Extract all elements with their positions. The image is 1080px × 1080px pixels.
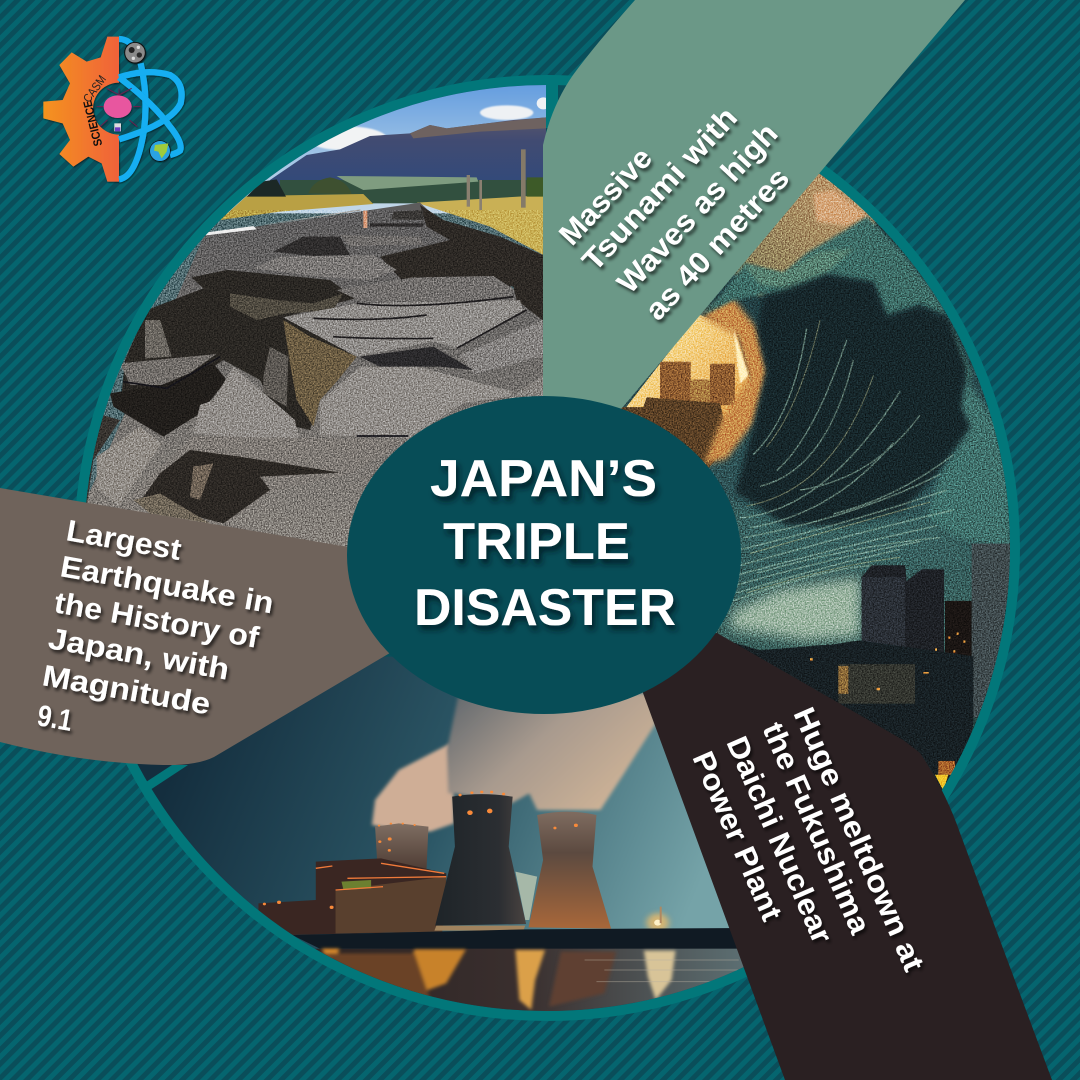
title: DISASTER [414,579,676,637]
earthquake label: Magnitude [40,659,213,721]
earthquake label: the History of [52,586,262,655]
earthquake label: Japan, with [46,622,232,687]
meltdown label: Huge meltdown at [787,703,930,976]
icon: atom orbits [119,39,182,179]
band: tsunami [543,0,965,420]
meltdown label: the Fukushima [756,718,876,939]
ring spur top [546,78,558,128]
icon: orange half gear [43,37,119,182]
title: JAPAN’S [430,450,657,508]
central ellipse [347,396,741,714]
earthquake label: Earthquake in [58,550,276,620]
logo wordmark: science: SCIENCE [80,99,105,148]
logo wordmark: casm: CASM [80,73,109,105]
title [414,450,676,637]
meltdown label: Power Plant [686,747,788,926]
meltdown label [686,703,930,976]
band: earthquake [0,488,395,765]
photo: tsunami wave over city [620,174,1010,790]
photo: cracked road after earthquake [86,85,546,547]
icon: earth [150,141,170,161]
tsunami label: Massive [553,142,659,252]
earthquake label: Largest [64,514,184,567]
logo: Sciencecasm [43,37,182,182]
earthquake label [35,514,276,738]
earthquake label: 9.1 [35,699,75,738]
ring spur lower left [146,765,188,790]
tsunami label [553,101,796,327]
tsunami label: as 40 metres [639,162,796,327]
icon: brain bulb [97,88,141,131]
band: meltdown [640,633,1052,1080]
photo: nuclear power plant at dusk [138,656,744,1011]
icon: moon [125,42,145,63]
meltdown label: Daichi Nuclear [720,732,839,949]
title: TRIPLE [443,513,630,571]
tsunami label: Tsunami with [576,101,744,278]
tsunami label: Waves as high [611,117,784,300]
teal ring [79,80,1015,1016]
